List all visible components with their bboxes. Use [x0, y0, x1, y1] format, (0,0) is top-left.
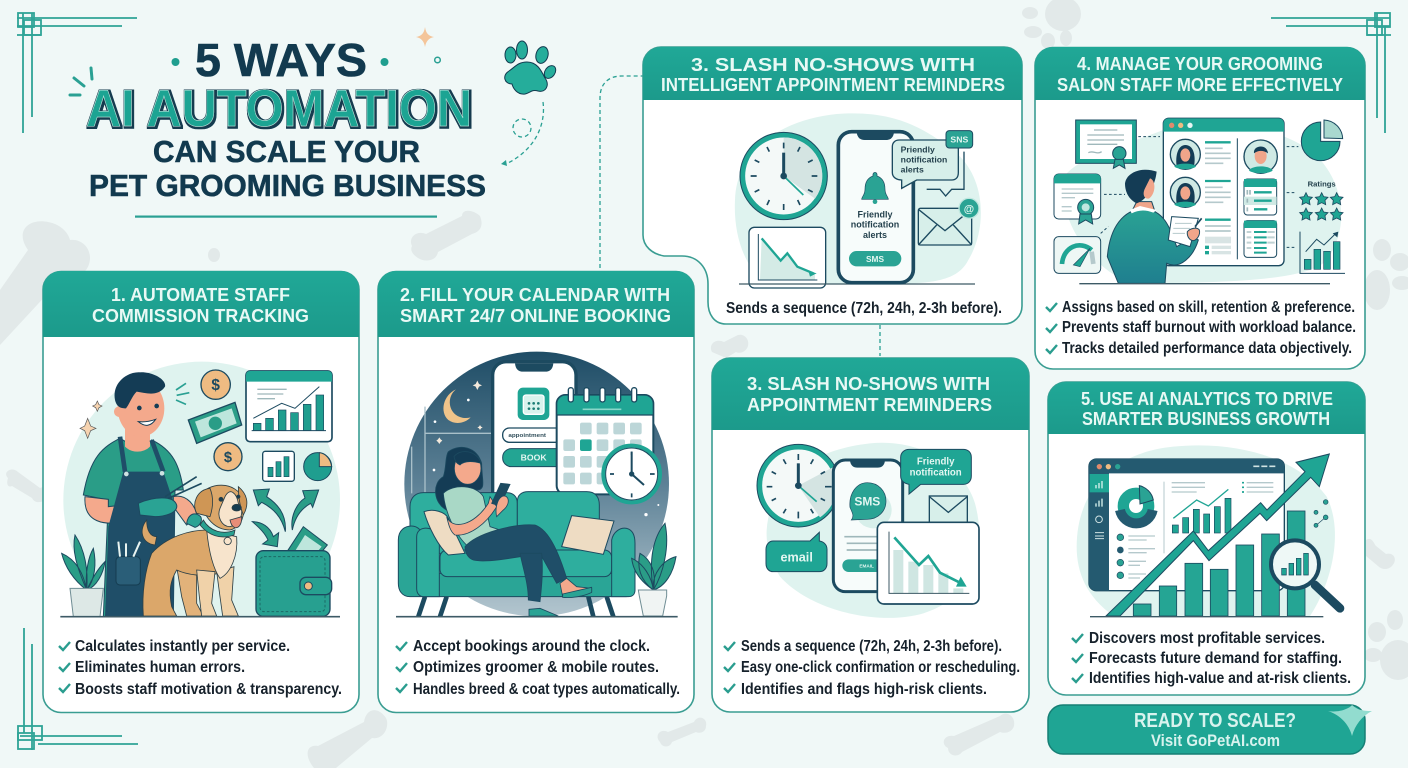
icon: coins and banknote: $ — [211, 377, 220, 394]
panel 4: manage staff — [1035, 47, 1365, 369]
CTA text: Visit GoPetAI.com — [1151, 731, 1280, 750]
icon: coins and banknote — [188, 370, 242, 471]
panel 1: commission tracking — [43, 271, 359, 712]
phone with bell: SMS — [866, 254, 884, 264]
phone with bell: alerts — [863, 230, 887, 240]
ratings stars: Ratings — [1308, 180, 1336, 189]
phone with bell — [838, 132, 913, 283]
panel 3B illustration: clock, phone, email, decline chart — [757, 443, 979, 618]
icon: envelope — [918, 198, 979, 245]
panel 1 bullets — [59, 638, 342, 698]
panel 1 heading: COMMISSION TRACKING — [92, 305, 309, 326]
chart window — [246, 371, 332, 442]
panel 5 heading — [1048, 382, 1365, 434]
panel 4 heading — [1035, 47, 1365, 100]
phone with SMS bubble — [833, 460, 903, 592]
panel 1 bullets: Boosts staff motivation & transparency. — [75, 681, 342, 698]
bar chart — [1133, 511, 1305, 616]
icon: pie chart — [1301, 120, 1343, 161]
panel 3A heading — [643, 47, 1022, 100]
panel 2 heading: 2. FILL YOUR CALENDAR WITH — [400, 284, 670, 305]
icon: envelope — [929, 496, 967, 524]
panel 4 bullets: Tracks detailed performance data objectively. — [1062, 340, 1352, 357]
notification bubble with SNS tag: alerts — [901, 165, 924, 175]
phone with bell: notification — [851, 220, 899, 230]
floor line — [396, 614, 678, 619]
panel 3B heading: 3. SLASH NO-SHOWS WITH — [747, 373, 990, 394]
phone with bell: Friendly — [858, 209, 892, 219]
panel 5 illustration: dashboard with growth arrow — [1077, 445, 1340, 617]
woman with phone — [436, 447, 592, 616]
staff dashboard window — [1163, 118, 1284, 266]
panel 2 bullets: Handles breed & coat types automatically. — [413, 681, 680, 698]
corner ornament: top right — [1271, 13, 1391, 133]
corner ornament: top left — [17, 13, 137, 133]
panel 3B bullets — [724, 638, 1020, 698]
icon: clock — [740, 132, 827, 220]
phone with booking form: appointment — [508, 433, 546, 439]
icon: potted plant — [632, 523, 676, 616]
CTA text — [1134, 710, 1296, 750]
icon: certificate — [1076, 120, 1136, 168]
panel 5: analytics — [1048, 382, 1365, 695]
panel 5 bullets — [1072, 630, 1351, 687]
panel 5 bullets: Identifies high-value and at-risk clients. — [1089, 670, 1351, 687]
panel 5 bullets: Forecasts future demand for staffing. — [1089, 650, 1342, 667]
icon: paw print — [505, 41, 558, 94]
panel 4 bullets — [1046, 299, 1356, 357]
friendly notification bubble: Friendly — [917, 456, 955, 467]
title line: pet grooming business: PET GROOMING BUSINESS — [89, 168, 486, 203]
manager figure — [1107, 170, 1202, 283]
panel 4 heading: SALON STAFF MORE EFFECTIVELY — [1057, 74, 1344, 95]
arrow: dashed connector to panel 3 — [600, 76, 643, 268]
icon: wall clock — [603, 446, 660, 502]
icon: decline chart — [749, 227, 826, 288]
panel 2 illustration: woman on sofa booking by phone — [396, 352, 678, 617]
panel 4 bullets: Prevents staff burnout with workload balance. — [1062, 319, 1356, 336]
decline chart — [877, 522, 979, 604]
friendly notification bubble: notification — [910, 468, 962, 479]
panel 4 illustration: manager reviewing staff dashboard — [1054, 118, 1345, 284]
icon: growth chart — [1300, 232, 1345, 273]
email bubble: email — [780, 550, 813, 564]
notification bubble with SNS tag: SNS — [950, 135, 968, 145]
panel 3A illustration: clock, phone, notifications — [735, 113, 981, 288]
panel 5 heading: SMARTER BUSINESS GROWTH — [1082, 408, 1330, 429]
panel 3B bullets: Sends a sequence (72h, 24h, 2-3h before). — [741, 638, 1002, 655]
panel 2 heading: SMART 24/7 ONLINE BOOKING — [400, 305, 671, 326]
panel 3B: appointment reminders — [712, 358, 1029, 712]
groomer figure — [83, 372, 202, 617]
icon: wallet — [256, 527, 332, 616]
panel 3B heading — [712, 358, 1029, 430]
notification bubble with SNS tag — [892, 131, 973, 196]
title line: can scale your: CAN SCALE YOUR — [153, 134, 420, 169]
icon: curved arrows — [252, 489, 319, 547]
title sparkle and tick accents — [70, 27, 440, 95]
panel 2: online booking — [378, 271, 694, 712]
notification bubble with SNS tag: Priendly — [901, 145, 935, 155]
panel 1 bullets: Calculates instantly per service. — [75, 638, 290, 655]
phone with SMS bubble: EMAIL — [859, 563, 874, 568]
panel 1 bullets: Eliminates human errors. — [75, 659, 245, 676]
panel 3B heading: APPOINTMENT REMINDERS — [747, 394, 992, 415]
sofa — [398, 492, 635, 617]
small bar chart and pie — [263, 451, 332, 481]
title line: AI automation: AI AUTOMATION — [86, 80, 472, 138]
icon: clock — [757, 444, 840, 527]
icon: envelope: @ — [964, 203, 974, 215]
panel 2 bullets — [396, 638, 680, 698]
arrow: rising trend — [1106, 454, 1329, 616]
panel 5 heading: 5. USE AI ANALYTICS TO DRIVE — [1081, 388, 1333, 409]
panel 3A heading: 3. SLASH NO-SHOWS WITH — [691, 54, 975, 75]
dog — [142, 485, 247, 616]
icon: gauge — [1054, 237, 1101, 273]
icon: sparkles — [80, 401, 102, 438]
email bubble — [766, 532, 827, 572]
ratings stars — [1300, 180, 1343, 220]
icon: plant — [62, 535, 105, 617]
panel 3A: intelligent reminders — [643, 47, 1022, 324]
floor line — [1090, 615, 1323, 619]
icon: coins and banknote: $ — [224, 450, 232, 466]
panel 3B bullets: Identifies and flags high-risk clients. — [741, 681, 987, 698]
panel 1 heading — [43, 271, 359, 337]
panel 3A caption: Sends a sequence (72h, 24h, 2-3h before). — [726, 300, 1002, 317]
title block — [86, 34, 486, 218]
call to action — [1048, 705, 1372, 754]
title underline — [135, 216, 437, 218]
arrow: dashed connector between reminder panels — [879, 325, 881, 356]
icon: magnifying glass — [1271, 540, 1340, 608]
floor line — [1079, 282, 1330, 286]
panel 1 illustration: groomer, dog, money charts — [60, 362, 340, 638]
staff avatars — [1170, 139, 1277, 207]
icon: moon and stars — [433, 381, 659, 516]
floor line — [60, 614, 340, 619]
calendar — [557, 388, 653, 494]
icon: skill badge window — [1054, 174, 1101, 224]
friendly notification bubble — [901, 449, 971, 494]
panel 1 heading: 1. AUTOMATE STAFF — [111, 284, 290, 305]
CTA sparkle — [1328, 705, 1372, 736]
arrow: dashed paw trail — [501, 102, 543, 166]
CTA text: READY TO SCALE? — [1134, 710, 1296, 732]
notification bubble with SNS tag: notification — [901, 155, 947, 165]
analytics dashboard window — [1089, 459, 1284, 591]
phone with booking form: BOOK — [521, 453, 547, 463]
panel 5 bullets: Discovers most profitable services. — [1089, 630, 1325, 647]
panel 2 heading — [378, 271, 694, 337]
staff mini tables — [1244, 179, 1277, 257]
panel 3B bullets: Easy one-click confirmation or rescheduling. — [741, 659, 1020, 676]
title line: 5 ways: 5 WAYS — [195, 34, 367, 86]
donut chart — [1120, 486, 1153, 523]
phone with booking form — [493, 362, 576, 508]
panel 2 bullets: Accept bookings around the clock. — [413, 638, 650, 655]
panel 4 heading: 4. MANAGE YOUR GROOMING — [1077, 53, 1323, 74]
corner ornament: bottom left — [18, 628, 138, 750]
panel 2 bullets: Optimizes groomer & mobile routes. — [413, 659, 659, 676]
panel 3A heading: INTELLIGENT APPOINTMENT REMINDERS — [661, 74, 1005, 95]
data dots — [1314, 500, 1328, 527]
floor line — [739, 282, 975, 286]
phone with SMS bubble: SMS — [854, 495, 880, 509]
title dots — [172, 58, 388, 66]
panel 4 bullets: Assigns based on skill, retention & preference. — [1062, 299, 1355, 316]
